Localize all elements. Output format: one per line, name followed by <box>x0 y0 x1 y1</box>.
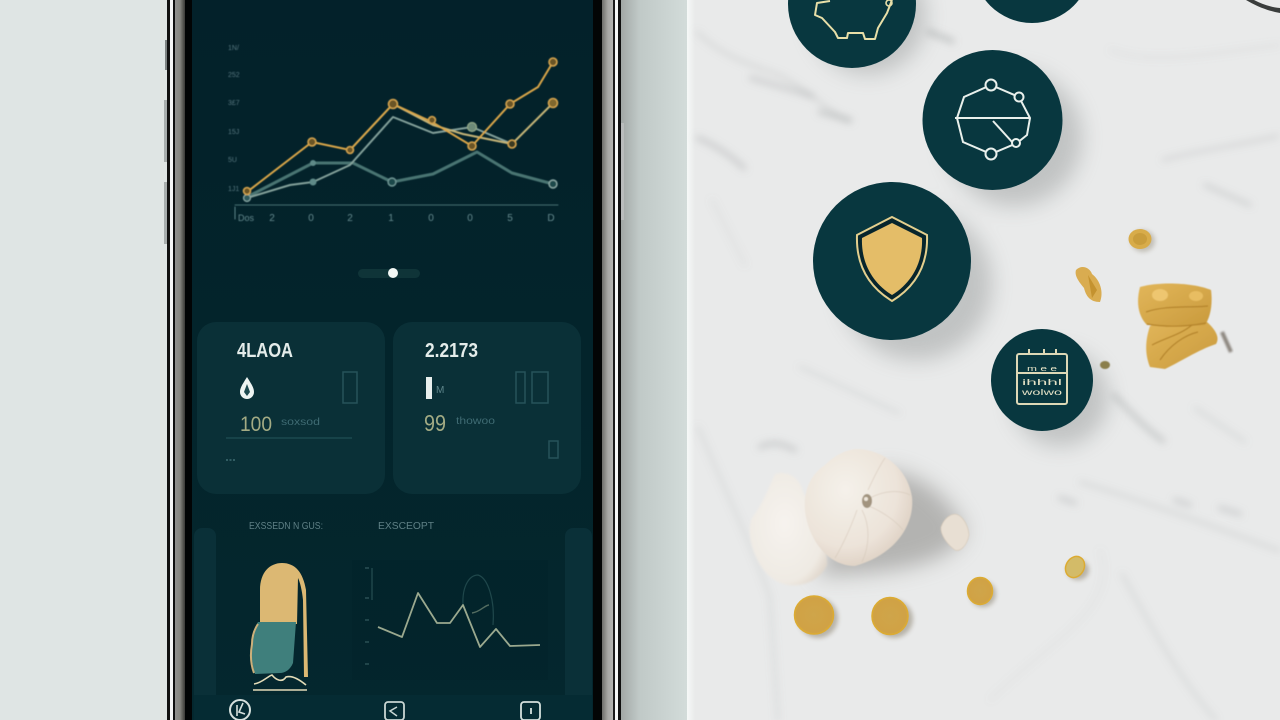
metric caption: soxsod <box>281 417 320 428</box>
panel: phone body <box>164 0 624 720</box>
icon: faint glyphs <box>516 372 558 458</box>
panel: lower section side tabs <box>194 528 592 720</box>
chart: line chart <box>228 45 558 224</box>
y axis labels: 1J1 <box>228 186 239 193</box>
y axis labels: 15J <box>228 129 239 136</box>
icon: dark object in top corner <box>1246 0 1280 13</box>
x axis labels: D <box>547 213 555 224</box>
gold crumpled piece <box>1138 283 1231 369</box>
x axis labels: 1 <box>388 213 394 224</box>
stat value: 2.2173 <box>425 340 478 362</box>
icon badge: piggy bank <box>788 0 916 68</box>
metric caption: thowoo <box>456 416 496 427</box>
x axis labels: Dos <box>238 213 254 223</box>
stat value: 4LAOA <box>237 340 293 362</box>
y axis labels: 1N/ <box>228 45 239 52</box>
x axis labels: 0 <box>308 213 314 224</box>
grey series <box>244 117 512 202</box>
y axis labels: 3£7 <box>228 100 240 107</box>
icon: nav circle <box>230 700 250 720</box>
icon badge: calendar: ihhhl <box>1022 378 1063 387</box>
icon badge: shield <box>813 182 971 340</box>
gold crumbs <box>1076 229 1155 369</box>
x axis labels: 5 <box>507 213 513 224</box>
y axis labels: 5U <box>228 157 237 164</box>
x axis labels: 2 <box>269 213 275 224</box>
y axis labels: 252 <box>228 72 240 79</box>
chart: small line chart <box>352 560 548 680</box>
heading: right lower label: EXSCEOPT <box>378 521 434 532</box>
x axis labels: 0 <box>428 213 434 224</box>
teal series <box>247 152 557 197</box>
shadows under circles <box>810 0 1108 446</box>
garlic clove <box>941 514 969 550</box>
x axis labels: 2 <box>347 213 353 224</box>
icon: water drop <box>240 377 254 399</box>
icon: nav wallet <box>385 702 404 720</box>
gold coins <box>794 553 1089 638</box>
metric 100: 100 <box>240 413 272 436</box>
beige series <box>350 98 558 150</box>
gold series <box>244 58 557 194</box>
heading: left lower label: EXSSEDN N GUS: <box>249 521 323 532</box>
icon: nav calendar <box>521 702 540 720</box>
garlic bulbs <box>750 449 965 585</box>
small garlic bulb <box>750 473 827 585</box>
icon badge: calendar: m e e <box>1027 366 1057 373</box>
label: M <box>436 385 444 396</box>
panel: marble countertop <box>687 0 1280 720</box>
icon badge: calendar <box>991 329 1093 431</box>
icon: white bar <box>426 377 432 399</box>
metric 99: 99 <box>424 410 446 436</box>
panel: left backdrop wall <box>0 0 688 720</box>
panel: right stat card <box>393 322 581 494</box>
chart: capsule gauge <box>251 563 308 690</box>
x axis labels: 0 <box>467 213 473 224</box>
icon badge: calendar: wolwo <box>1020 388 1063 397</box>
y axis labels <box>228 45 240 193</box>
large garlic bulb <box>805 449 912 566</box>
x axis labels <box>238 213 555 224</box>
icon badge: network chart <box>922 50 1062 190</box>
icon: faint glyph <box>343 372 357 403</box>
pagination indicator <box>358 268 420 278</box>
icon badge: top circle <box>973 0 1091 23</box>
panel: left stat card <box>197 322 385 494</box>
